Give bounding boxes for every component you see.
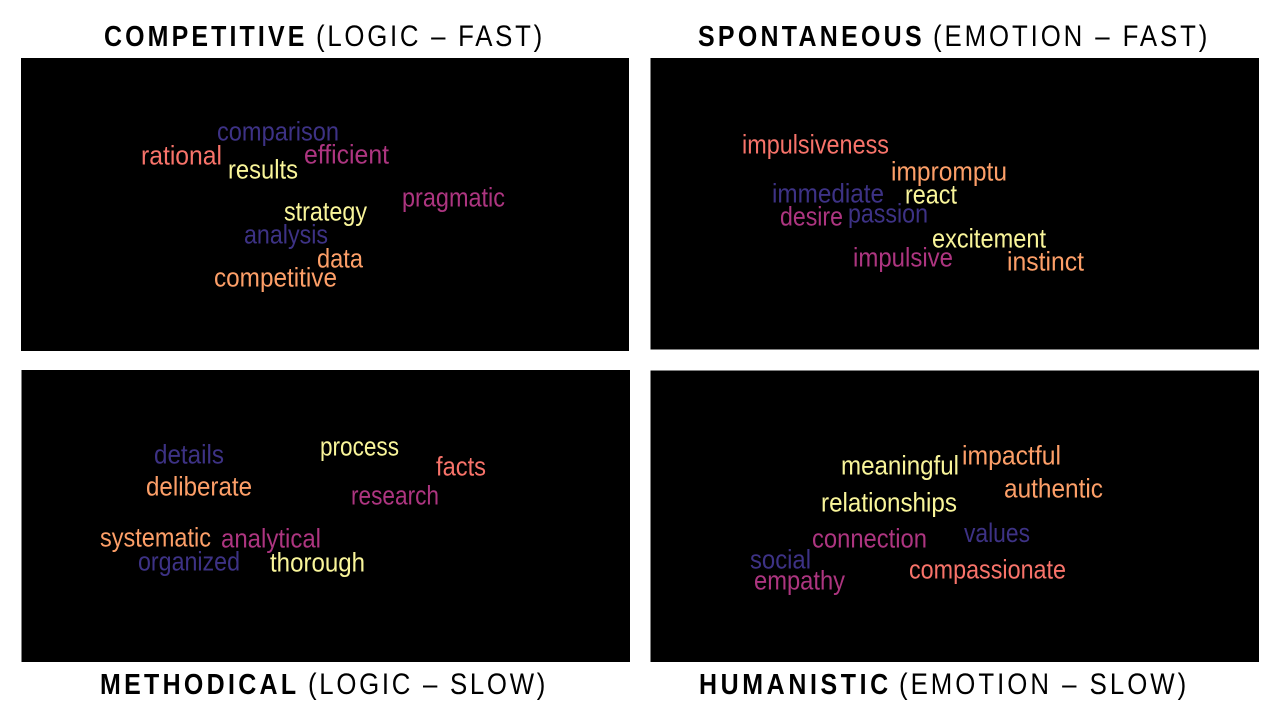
panel: spontaneous word cloud: react — [905, 180, 957, 210]
heading: spontaneous — [698, 19, 1207, 52]
panel: spontaneous word cloud: instinct — [1007, 247, 1084, 277]
panel: spontaneous word cloud: excitement — [932, 224, 1046, 254]
panel: spontaneous word cloud: immediate — [772, 179, 884, 209]
panel: competitive word cloud: results — [228, 155, 298, 185]
panel: methodical word cloud: deliberate — [146, 472, 252, 502]
panel: methodical word cloud: facts — [436, 452, 486, 482]
panel: spontaneous word cloud: desire — [780, 202, 843, 232]
panel: competitive word cloud: rational — [141, 141, 222, 171]
panel: humanistic word cloud: social — [750, 545, 811, 575]
panel: spontaneous word cloud: impromptu — [891, 157, 1007, 187]
panel: spontaneous word cloud: impulsiveness — [742, 130, 889, 160]
panel: humanistic word cloud: authentic — [1004, 473, 1103, 503]
panel: methodical word cloud: analytical — [221, 524, 321, 554]
heading: spontaneous: (EMOTION – FAST) — [933, 19, 1207, 52]
panel: methodical word cloud — [22, 370, 630, 662]
heading: competitive: COMPETITIVE — [104, 20, 304, 52]
heading: competitive: (LOGIC – FAST) — [316, 19, 542, 52]
heading: competitive — [104, 19, 542, 52]
panel: spontaneous word cloud — [650, 58, 1259, 350]
heading: spontaneous: SPONTANEOUS — [698, 20, 922, 52]
panel: competitive word cloud: pragmatic — [402, 183, 505, 213]
panel: competitive word cloud — [21, 58, 629, 351]
heading: humanistic — [699, 667, 1186, 700]
panel: methodical word cloud: details — [154, 439, 224, 469]
panel: humanistic word cloud: relationships — [821, 488, 957, 518]
panel: humanistic word cloud: empathy — [754, 565, 845, 595]
panel: competitive word cloud: competitive — [214, 263, 337, 293]
panel: spontaneous word cloud: impulsive — [853, 243, 953, 273]
heading: humanistic: HUMANISTIC — [699, 668, 888, 700]
panel: methodical word cloud: thorough — [270, 548, 365, 578]
panel: competitive word cloud: analysis — [244, 220, 328, 250]
panel: humanistic word cloud: impactful — [962, 441, 1061, 471]
panel: methodical word cloud: organized — [138, 546, 240, 576]
heading: humanistic: (EMOTION – SLOW) — [899, 667, 1186, 700]
panel: methodical word cloud: systematic — [100, 522, 211, 552]
panel: humanistic word cloud: meaningful — [841, 450, 959, 480]
panel: humanistic word cloud — [650, 370, 1259, 662]
heading: methodical: (LOGIC – SLOW) — [308, 667, 545, 700]
panel: methodical word cloud: process — [320, 431, 399, 461]
heading: methodical — [100, 667, 545, 700]
panel: methodical word cloud: research — [351, 481, 439, 511]
panel: humanistic word cloud: connection — [812, 523, 927, 553]
panel: competitive word cloud: data — [317, 244, 364, 274]
panel: humanistic word cloud: compassionate — [909, 555, 1066, 585]
panel: spontaneous word cloud: passion — [848, 199, 928, 229]
heading: methodical: METHODICAL — [100, 668, 296, 700]
panel: humanistic word cloud: values — [964, 518, 1030, 548]
panel: competitive word cloud: strategy — [284, 197, 367, 227]
panel: competitive word cloud: efficient — [304, 140, 389, 170]
panel: competitive word cloud: comparison — [217, 117, 339, 147]
